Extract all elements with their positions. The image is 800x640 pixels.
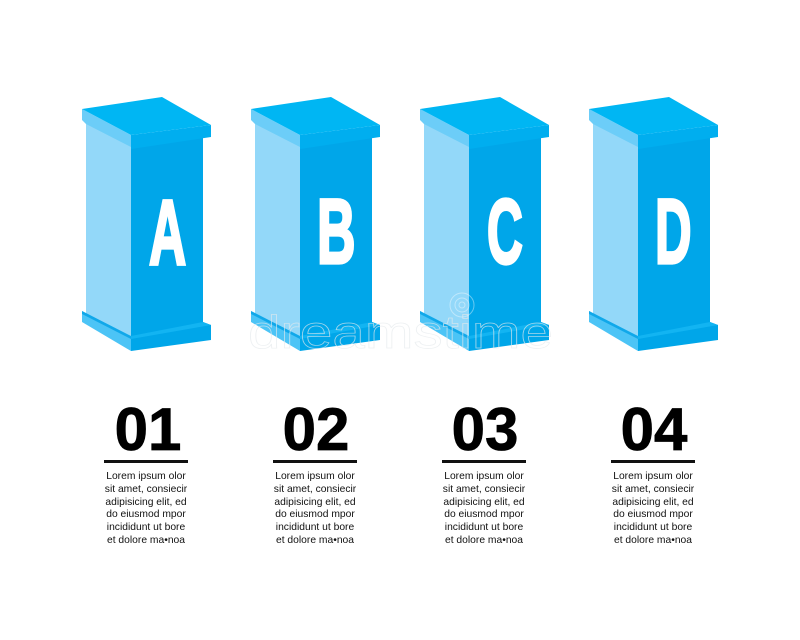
step 04 xyxy=(611,396,695,546)
column A xyxy=(82,97,211,351)
description 04: do eiusmod mpor xyxy=(613,509,693,520)
description 03: et dolore ma•noa xyxy=(445,535,523,546)
description 01: et dolore ma•noa xyxy=(107,535,185,546)
column C xyxy=(420,97,549,351)
description 01: Lorem ipsum olor xyxy=(106,471,186,482)
description 03: Lorem ipsum olor xyxy=(444,471,524,482)
step 04: 04 xyxy=(621,396,688,463)
step 03: 03 xyxy=(452,396,518,463)
description 02: Lorem ipsum olor xyxy=(275,471,355,482)
letter D: D xyxy=(655,180,692,283)
description 02: et dolore ma•noa xyxy=(276,535,354,546)
step 02 xyxy=(273,396,357,546)
description 01: do eiusmod mpor xyxy=(106,509,186,520)
description 04: adipisicing elit, ed xyxy=(612,497,694,508)
description 04: Lorem ipsum olor xyxy=(613,471,693,482)
description 01: adipisicing elit, ed xyxy=(105,497,187,508)
description 04: et dolore ma•noa xyxy=(614,535,692,546)
step 02: 02 xyxy=(283,396,349,463)
description 03: sit amet, consiecir xyxy=(443,484,526,495)
step 01 xyxy=(104,396,188,546)
letter C: C xyxy=(487,180,523,283)
description 02: incididunt ut bore xyxy=(276,522,354,533)
step 03 xyxy=(442,396,526,546)
watermark: dreamstime xyxy=(248,306,553,358)
description 04: incididunt ut bore xyxy=(614,522,692,533)
letter A: A xyxy=(149,181,186,284)
column B xyxy=(251,97,380,351)
description 04: sit amet, consiecir xyxy=(612,484,695,495)
description 03: do eiusmod mpor xyxy=(444,509,524,520)
description 02: sit amet, consiecir xyxy=(274,484,357,495)
description 03: incididunt ut bore xyxy=(445,522,523,533)
step 01: 01 xyxy=(115,396,181,463)
letter B: B xyxy=(317,180,356,283)
description 01: incididunt ut bore xyxy=(107,522,185,533)
description 02: do eiusmod mpor xyxy=(275,509,355,520)
description 03: adipisicing elit, ed xyxy=(443,497,525,508)
description 01: sit amet, consiecir xyxy=(105,484,188,495)
column D xyxy=(589,97,718,351)
watermark xyxy=(248,293,553,358)
description 02: adipisicing elit, ed xyxy=(274,497,356,508)
